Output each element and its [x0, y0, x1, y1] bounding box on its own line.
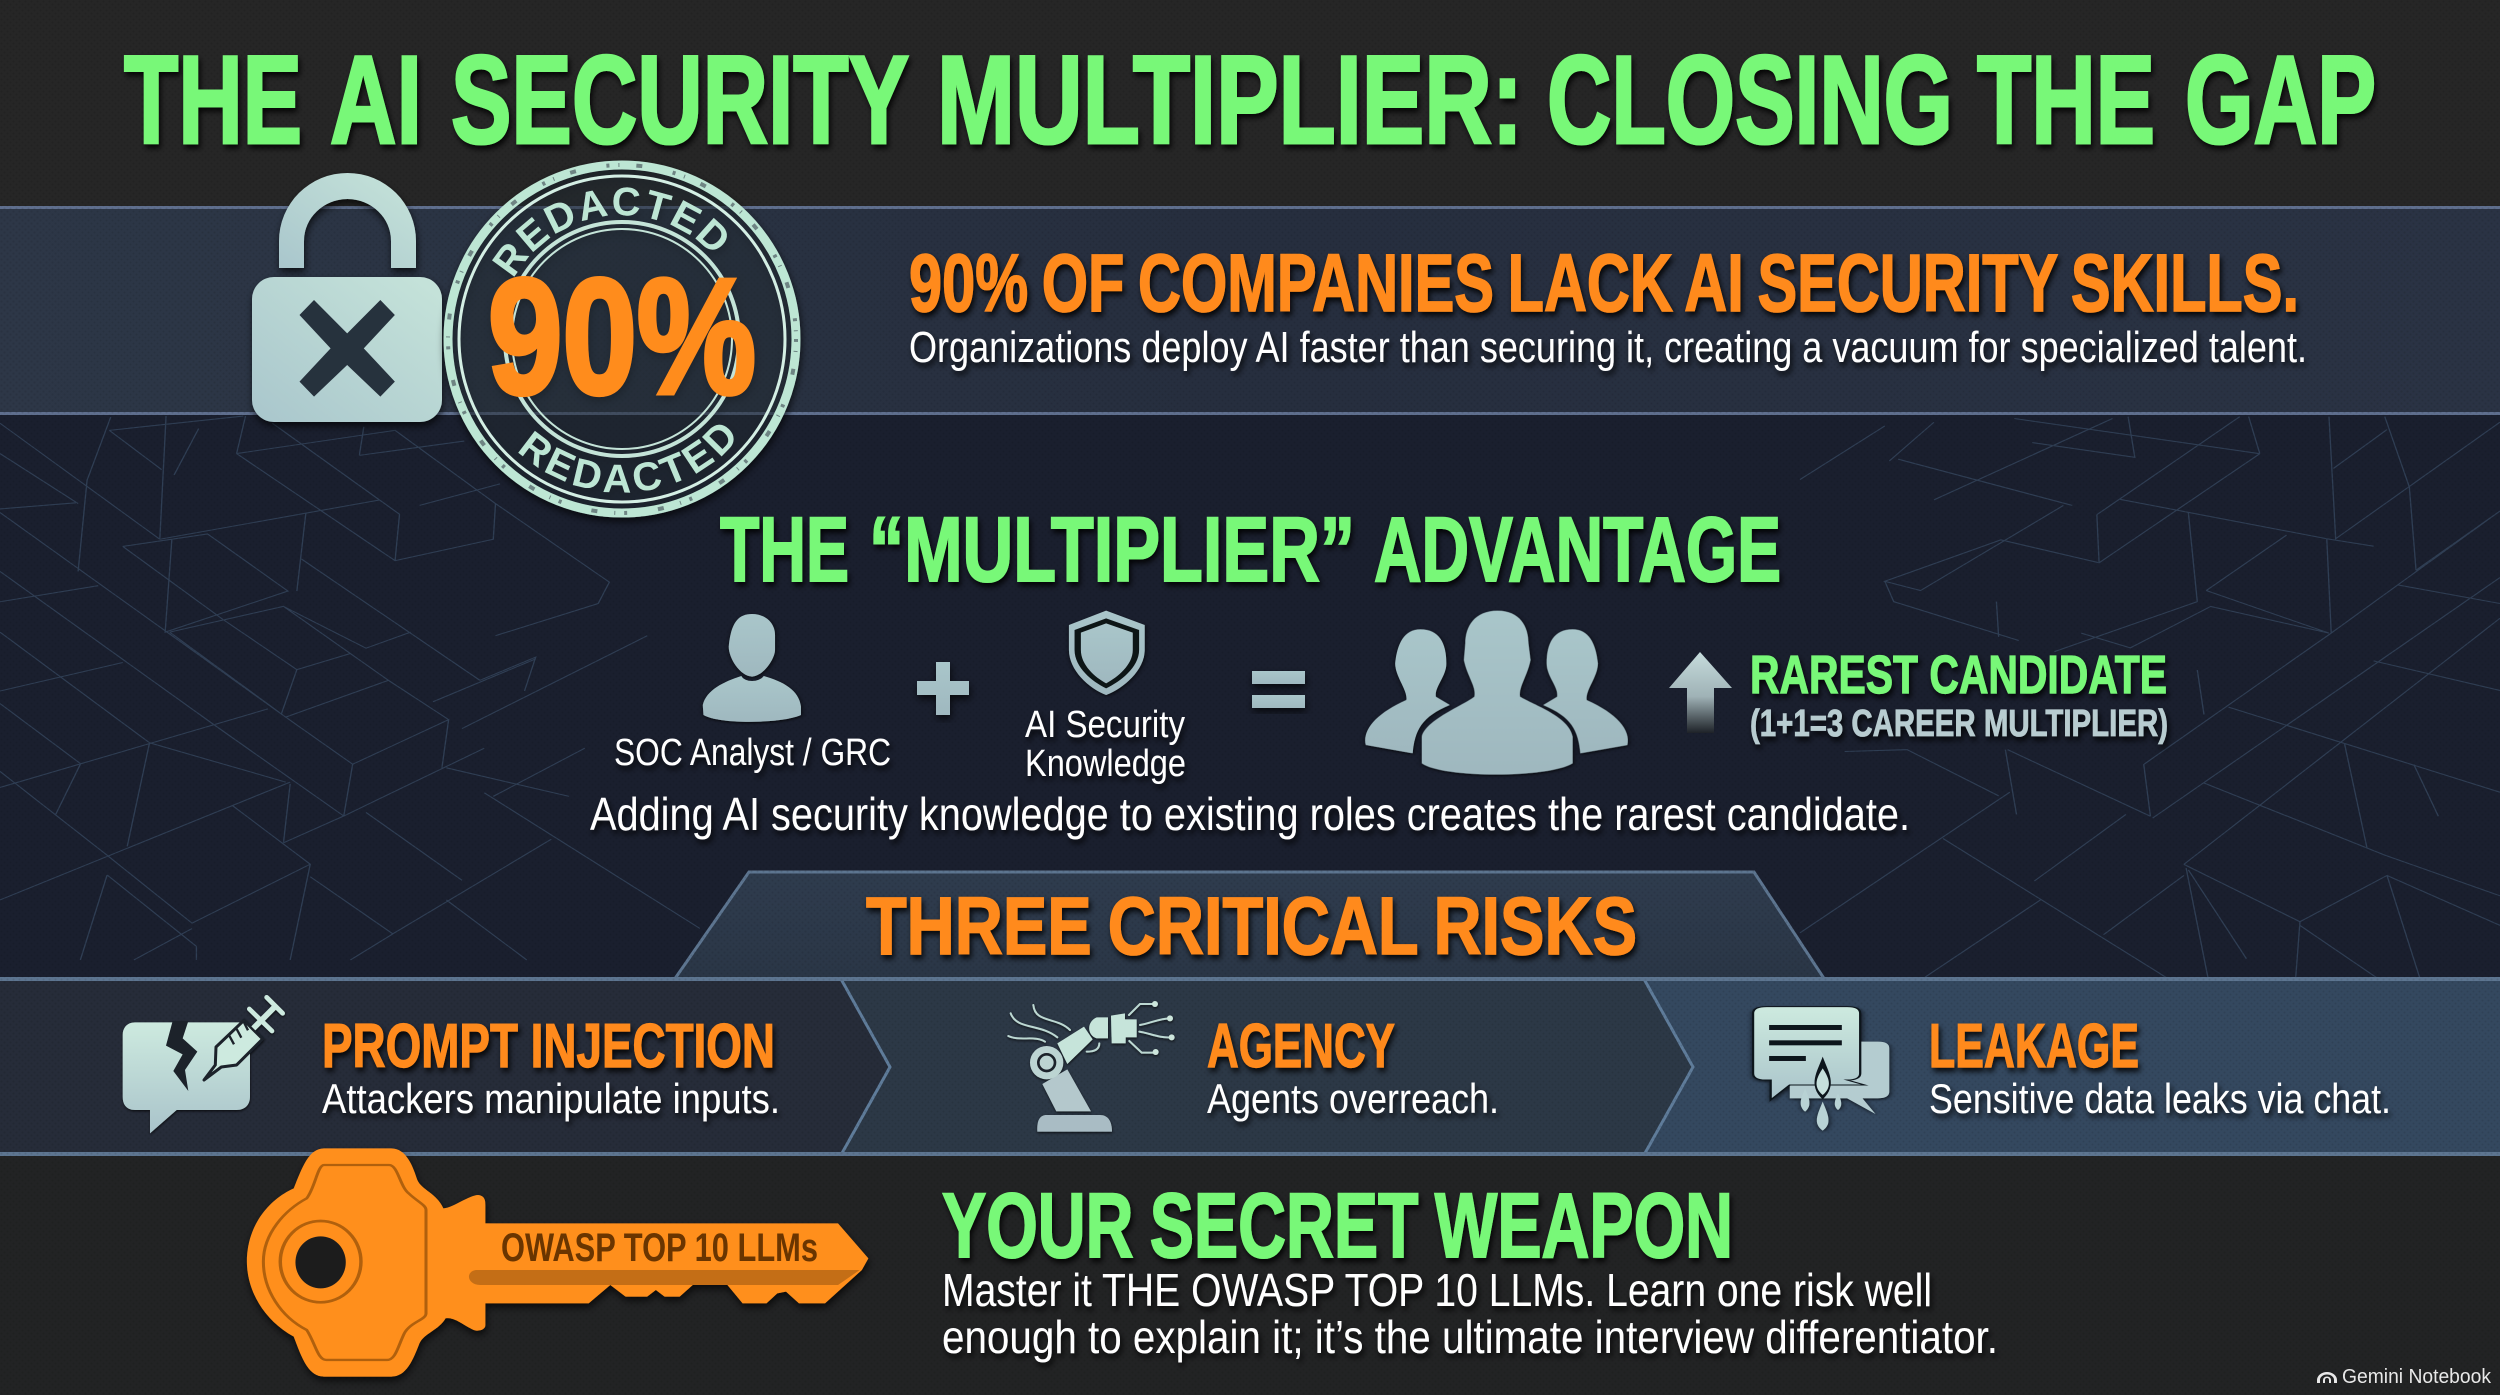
title: SECURITY	[451, 31, 909, 170]
heading: your secret weapon: YOUR SECRET WEAPON	[942, 1175, 1733, 1277]
text: agency description: Agents overreach.	[1207, 1075, 1499, 1122]
stamp: redacted 90 percent	[438, 160, 805, 524]
icon: prompt injection	[123, 997, 283, 1133]
icon: plus	[917, 662, 969, 715]
icon: robot arm	[1008, 1001, 1175, 1132]
background: wireframe right	[1800, 417, 2500, 980]
stamp text: redacted top: REDACTED	[492, 187, 727, 277]
text: secret weapon description: enough to explain it; it’s the ultimate interview differentiator.	[942, 1311, 1998, 1363]
label: SOC analyst: SOC Analyst / GRC	[614, 732, 891, 774]
icon: group of people	[1365, 611, 1628, 775]
icon: person	[703, 614, 801, 722]
callout: career multiplier: (1+1=3 CAREER MULTIPLIER)	[1750, 703, 2168, 745]
panel: risks band	[0, 977, 2500, 1156]
heading: multiplier advantage: THE	[720, 499, 849, 601]
stamp text: redacted bottom: REDACTED	[518, 424, 734, 493]
heading: multiplier advantage	[720, 499, 1781, 601]
text: secret weapon description: Master it THE OWASP TOP 10 LLMs. Learn one risk well	[942, 1264, 1932, 1316]
title: AI	[330, 31, 422, 170]
title: THE	[1977, 31, 2155, 170]
label: AI security knowledge: Knowledge	[1025, 743, 1186, 785]
heading: multiplier advantage: ADVANTAGE	[1374, 499, 1781, 601]
text: prompt injection title: PROMPT INJECTION	[322, 1012, 775, 1081]
panel: 90 percent band	[0, 206, 2500, 415]
icon: equals	[1252, 671, 1305, 708]
text: agency title: AGENCY	[1207, 1012, 1395, 1081]
title: GAP	[2185, 31, 2376, 170]
title: THE	[124, 31, 302, 170]
label: AI security knowledge: AI Security	[1025, 704, 1185, 746]
background: bottom section	[0, 1154, 2500, 1395]
icon: chat leak	[1753, 1007, 1889, 1131]
heading: multiplier advantage: “MULTIPLIER”	[869, 499, 1355, 601]
title: CLOSING	[1547, 31, 1953, 170]
panel: three critical risks heading tab	[674, 872, 1825, 980]
icon: orange key	[247, 1148, 868, 1377]
title	[124, 31, 2376, 170]
callout: rarest candidate: RAREST CANDIDATE	[1750, 645, 2167, 705]
text: leakage title: LEAKAGE	[1929, 1012, 2139, 1081]
background: wireframe left	[0, 416, 700, 960]
watermark: gemini notebook: Gemini Notebook	[2342, 1366, 2492, 1388]
text: prompt injection description: Attackers manipulate inputs.	[322, 1075, 780, 1122]
text: secret weapon description	[942, 1264, 1998, 1363]
label: AI security knowledge	[1025, 704, 1186, 785]
stat: 90 percent: 90%	[488, 245, 756, 428]
background: top section	[0, 0, 2500, 207]
text: leakage description: Sensitive data leaks via chat.	[1929, 1075, 2391, 1122]
text: multiplier description: Adding AI security knowledge to existing roles creates the rarest candidate.	[590, 788, 1910, 840]
icon: shield	[1069, 611, 1145, 695]
title: MULTIPLIER:	[937, 31, 1523, 170]
heading: three critical risks: THREE CRITICAL RISKS	[866, 881, 1637, 972]
key label: OWASP TOP 10 LLMs	[501, 1226, 818, 1270]
icon: up arrow	[1669, 652, 1732, 733]
background: middle section	[0, 413, 2500, 980]
icon: padlock with X	[252, 173, 442, 422]
